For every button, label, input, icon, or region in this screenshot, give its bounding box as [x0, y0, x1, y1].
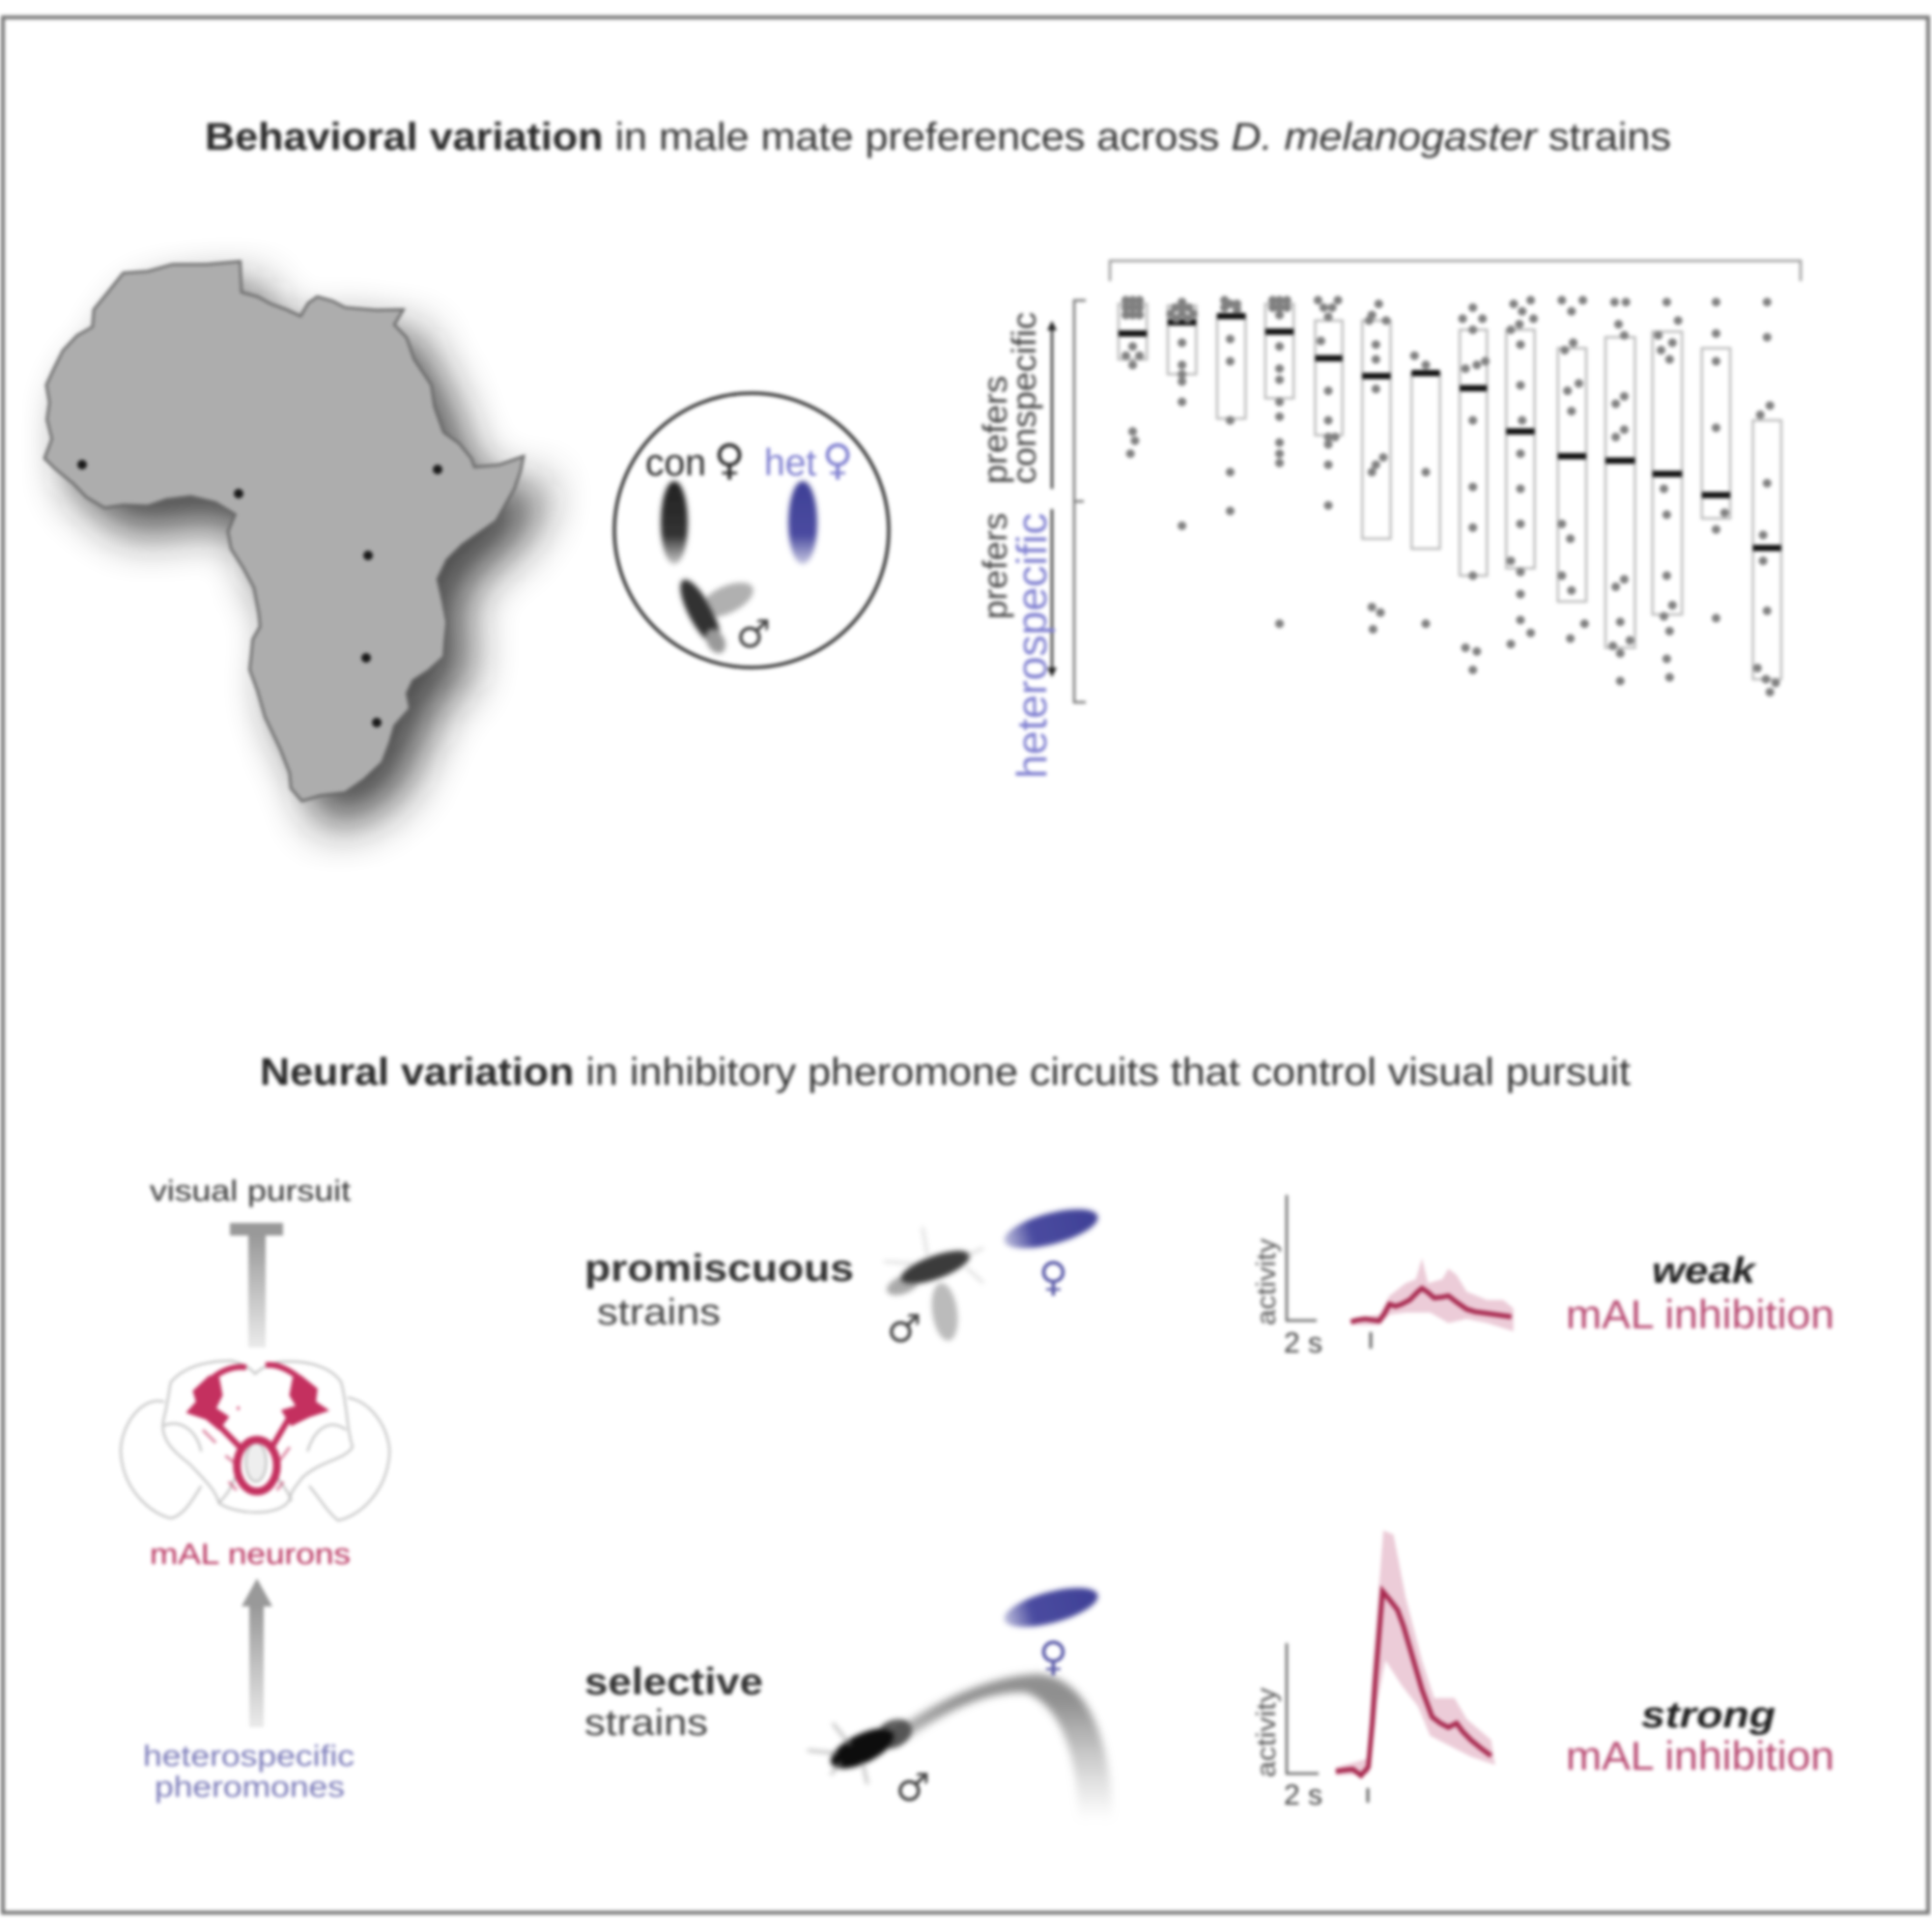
axis label: prefers heterospecific: heterospecific — [1009, 513, 1056, 779]
axis label: prefers heterospecific: prefers — [977, 513, 1014, 619]
map: Africa with sampling sites — [44, 261, 547, 826]
symbol: male: ♂ — [887, 1307, 922, 1351]
stimulus tick — [1370, 1332, 1372, 1349]
label: promiscuous strains: strains — [597, 1293, 721, 1333]
brain outline — [121, 1361, 389, 1520]
label: strong mAL inhibition — [1566, 1695, 1834, 1778]
response trace — [1336, 1530, 1495, 1776]
chart: weak mAL response — [1251, 1195, 1514, 1359]
y axis bracket — [1074, 300, 1086, 702]
fly: blue female — [1001, 1202, 1101, 1256]
scale bars — [1287, 1643, 1319, 1774]
fly: conspecific female — [661, 481, 688, 564]
label: selective strains: selective — [584, 1662, 763, 1703]
illustration: selective male pursuit — [808, 1580, 1113, 1821]
mAL neuron arbors — [186, 1365, 328, 1492]
map landmass — [44, 261, 524, 801]
title: behavioral variation: Behavioral variation in male mate preferences across D. melanogaster strains — [205, 116, 1671, 158]
symbol: male: ♂ — [895, 1766, 930, 1810]
label: promiscuous strains: promiscuous — [584, 1248, 854, 1290]
time scale label: 2 s — [1284, 1327, 1322, 1359]
pursuit trail — [902, 1674, 1113, 1821]
fly: heterospecific female — [788, 481, 817, 564]
arrow: prefers heterospecific — [1047, 509, 1057, 677]
assay chamber with flies — [614, 393, 889, 668]
label: selective strains: strains — [584, 1703, 708, 1744]
fly: blue female — [1001, 1580, 1101, 1634]
strain medians — [1119, 316, 1781, 548]
top bracket — [1110, 261, 1801, 281]
label: weak mAL inhibition — [1566, 1251, 1834, 1337]
label: promiscuous strains — [584, 1248, 854, 1333]
fly: black male — [808, 1714, 917, 1784]
label: weak mAL inhibition: weak — [1652, 1251, 1757, 1292]
axis label: activity: activity — [1251, 1688, 1281, 1777]
label: con female — [645, 436, 745, 485]
label: selective strains — [584, 1662, 763, 1744]
chart: strain mate preference box plots — [977, 261, 1801, 779]
symbol: female: ♀ — [1038, 1633, 1068, 1680]
axis label: prefers conspecific: prefers — [977, 376, 1014, 484]
axis label: prefers conspecific: conspecific — [1006, 312, 1043, 484]
symbol: male: ♂ — [736, 612, 771, 657]
map site dots — [77, 460, 442, 727]
axis label: prefers conspecific — [977, 312, 1043, 484]
axis label: activity: activity — [1251, 1238, 1281, 1325]
fly: male with extended wing — [884, 1227, 983, 1343]
axis label: prefers heterospecific — [977, 513, 1056, 779]
arrow: prefers conspecific — [1047, 321, 1057, 489]
label: het female — [764, 436, 853, 485]
individual data points — [1125, 300, 1776, 692]
fly: male — [673, 575, 758, 657]
map shadow — [70, 286, 547, 826]
label: weak mAL inhibition: mAL inhibition — [1566, 1292, 1834, 1337]
label: het female: het — [764, 442, 816, 484]
label: visual pursuit: visual pursuit — [150, 1174, 351, 1208]
response trace — [1350, 1258, 1514, 1331]
label: heterospecific pheromones — [143, 1739, 355, 1804]
title: neural variation: Neural variation in inhibitory pheromone circuits that control visual pursuit — [260, 1051, 1631, 1094]
strain boxes — [1119, 304, 1781, 679]
illustration: promiscuous male and female — [884, 1202, 1101, 1351]
label: con female: ♀ — [714, 436, 745, 485]
label: mAL neurons: mAL neurons — [150, 1537, 351, 1571]
chart: strong mAL response — [1251, 1530, 1495, 1811]
label: con female: con — [645, 442, 706, 484]
scale bars — [1287, 1195, 1317, 1321]
arrow: pheromone input — [242, 1578, 272, 1727]
boxes, medians and points — [1119, 300, 1781, 692]
brain: mAL neurons — [121, 1361, 389, 1520]
label: strong mAL inhibition: mAL inhibition — [1566, 1733, 1834, 1778]
time scale label: 2 s — [1284, 1779, 1322, 1811]
label: het female: ♀ — [822, 436, 853, 485]
label: heterospecific pheromones: pheromones — [155, 1770, 345, 1804]
label: heterospecific pheromones: heterospecific — [143, 1739, 355, 1773]
symbol: female: ♀ — [1038, 1253, 1068, 1300]
label: strong mAL inhibition: strong — [1641, 1695, 1776, 1736]
stimulus tick — [1366, 1788, 1370, 1803]
arrow: inhibition of visual pursuit — [230, 1223, 283, 1348]
